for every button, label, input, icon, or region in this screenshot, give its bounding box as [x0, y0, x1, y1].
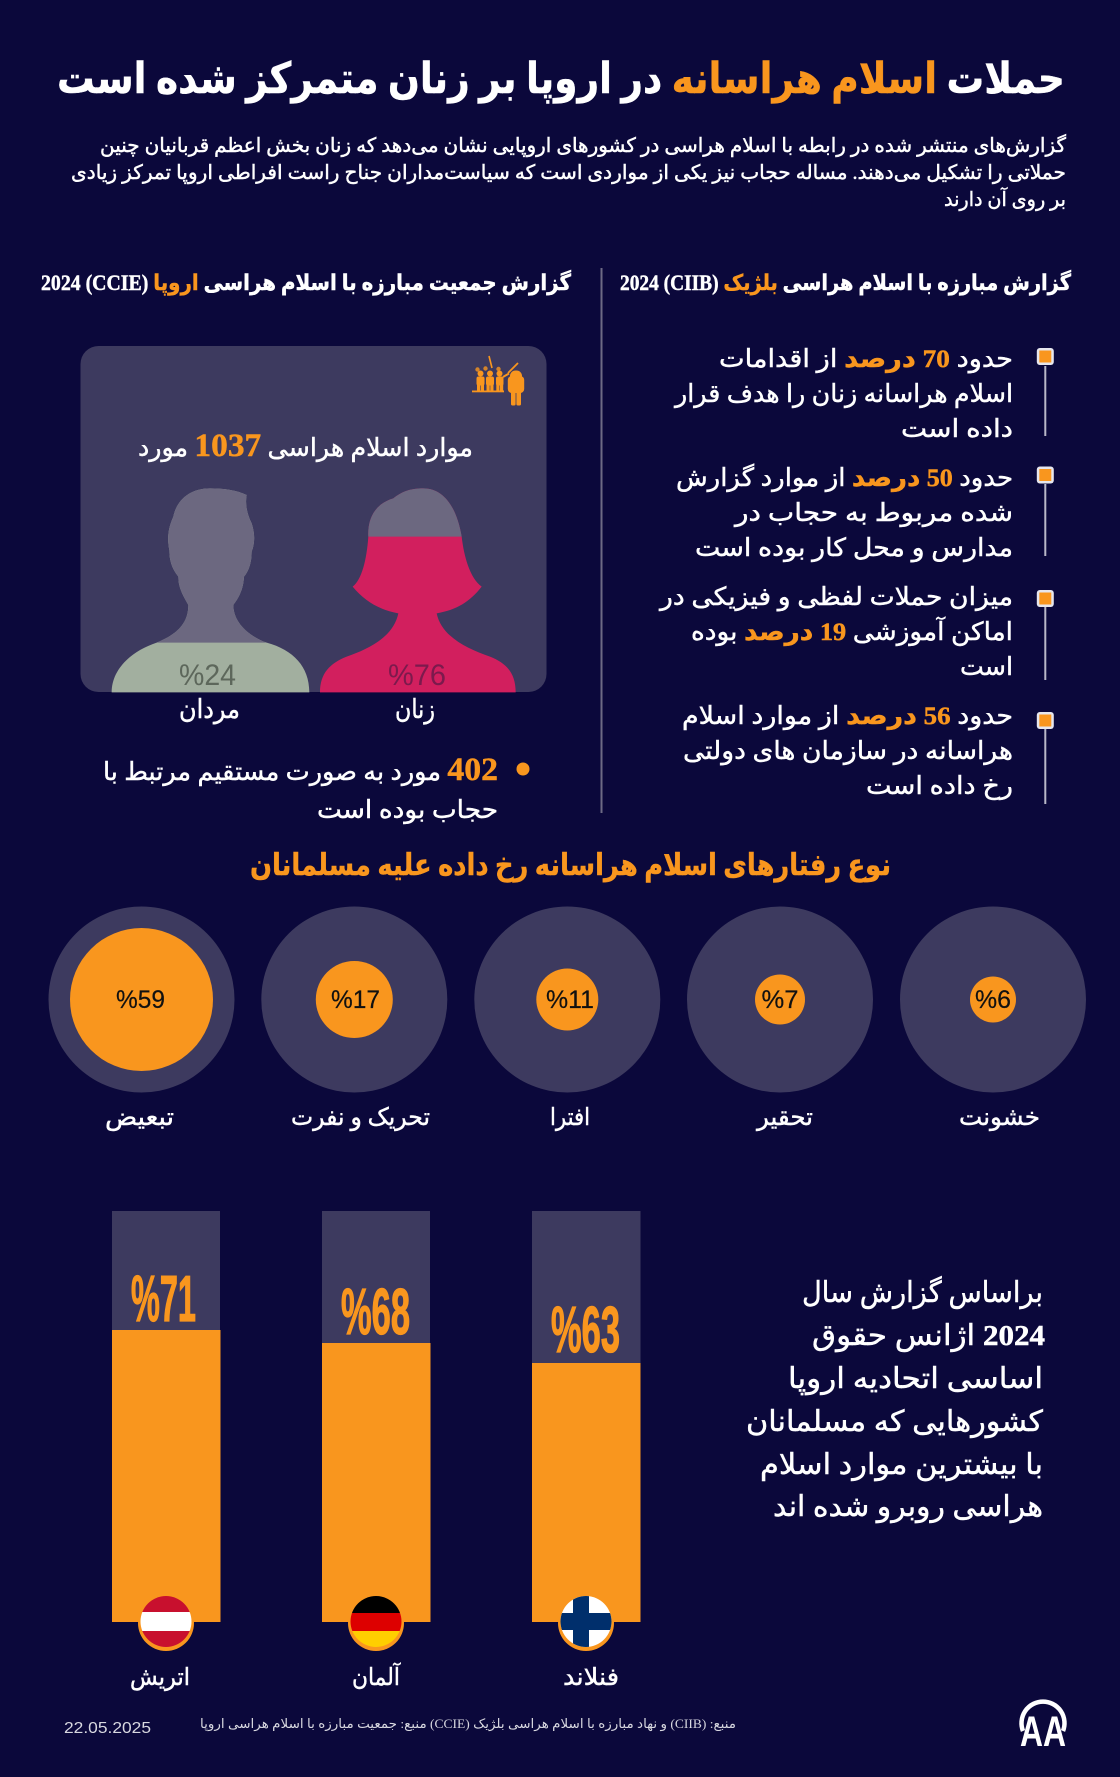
bubble: insult 7: %7 — [762, 986, 798, 1014]
bubble: incitement 17: تحریک و نفرت — [291, 1105, 430, 1131]
bubble: incitement 17 — [261, 906, 447, 1131]
panel: Belgium findings list — [658, 346, 1054, 804]
label: women: زنان — [395, 695, 435, 724]
list item 4: رخ داده است — [866, 773, 1013, 800]
bubble: slander 11: افترا — [550, 1105, 590, 1131]
list item 3 — [658, 584, 1054, 681]
text block: EU agency report: با بیشترین موارد اسلام — [760, 1449, 1043, 1481]
bar: Austria 71: %71 — [131, 1262, 196, 1335]
bubble: violence 6: %6 — [975, 986, 1011, 1014]
bubble: violence 6 — [900, 906, 1086, 1131]
bar: Finland 63: فنلاند — [563, 1665, 619, 1691]
callout: hijab cases: 402 مورد به صورت مستقیم مرتبط با — [103, 752, 498, 788]
intro text: گزارش‌های منتشر شده در رابطه با اسلام هراسی در کشورهای اروپایی نشان می‌دهد که زنان بخش اعظم قربانیان چنین — [100, 134, 1066, 158]
list item 1: داده است — [901, 416, 1013, 443]
bubble: insult 7 — [687, 906, 873, 1131]
text block: EU agency report — [746, 1276, 1045, 1523]
intro text — [71, 134, 1066, 211]
text block: EU agency report: 2024 اژانس حقوق — [812, 1320, 1045, 1352]
bubble: insult 7: تحقیر — [756, 1105, 813, 1131]
list item 4 — [682, 703, 1054, 804]
intro text: بر روی آن دارند — [944, 186, 1066, 211]
bubble: slander 11: %11 — [546, 986, 594, 1014]
logo: AA: AA — [1020, 1708, 1066, 1756]
list item 2 — [676, 463, 1054, 563]
bubble: discrimination 59: %59 — [116, 986, 165, 1014]
list item 1 — [673, 346, 1054, 443]
text block: EU agency report: اساسی اتحادیه اروپا — [788, 1363, 1043, 1396]
panel: Europe cases — [80, 346, 546, 692]
list item 1: اسلام هراسانه زنان را هدف قرار — [673, 381, 1013, 408]
list item 3: میزان حملات لفظی و فیزیکی در — [658, 584, 1013, 612]
date: 22.05.2025 — [64, 1720, 151, 1737]
bar: Finland 63 — [532, 1211, 640, 1691]
callout: hijab cases — [103, 752, 530, 824]
bar: Germany 68 — [322, 1211, 430, 1691]
men percentage: %24 — [179, 659, 236, 692]
list item 4: هراسانه در سازمان های دولتی — [683, 738, 1013, 766]
callout: hijab cases: حجاب بوده است — [317, 797, 498, 824]
bubble: violence 6: خشونت — [959, 1105, 1040, 1131]
list item 2: حدود 50 درصد از موارد گزارش — [676, 463, 1013, 493]
bar: Finland 63: %63 — [551, 1293, 620, 1366]
bubble: incitement 17: %17 — [331, 986, 380, 1014]
text block: EU agency report: براساس گزارش سال — [802, 1276, 1043, 1309]
bar: Austria 71 — [112, 1211, 220, 1691]
chart: behaviour bubbles — [48, 906, 1086, 1131]
list item 4: حدود 56 درصد از موارد اسلام — [682, 703, 1013, 731]
bar: Germany 68: آلمان — [352, 1662, 401, 1691]
icon: protesters and veiled woman — [472, 356, 524, 406]
bubble: slander 11 — [474, 906, 660, 1131]
heading: Belgium report: گزارش مبارزه با اسلام هراسی بلژیک (CIIB) 2024 — [620, 269, 1071, 296]
heading: Europe report: گزارش جمعیت مبارزه با اسلام هراسی اروپا (CCIE) 2024 — [41, 269, 571, 296]
logo: AA — [1020, 1702, 1066, 1756]
figure: men silhouette — [112, 488, 309, 692]
text block: EU agency report: هراسی روبرو شده اند — [773, 1491, 1043, 1523]
text block: EU agency report: کشورهایی که مسلمانان — [746, 1406, 1043, 1438]
label: men: مردان — [179, 695, 240, 725]
bar: Germany 68: %68 — [341, 1275, 410, 1348]
list item 1: حدود 70 درصد از اقدامات — [719, 346, 1013, 374]
list item 2: شده مربوط به حجاب در — [733, 500, 1013, 527]
source note: منبع: (CIIB) و نهاد مبارزه با اسلام هراسی بلژیک (CCIE) منبع: جمعیت مبارزه با اسلام هراسی اروپا — [200, 1716, 736, 1732]
list item 2: مدارس و محل کار بوده است — [695, 535, 1013, 563]
intro text: حملاتی را تشکیل می‌دهند. مساله حجاب نیز یکی از مواردی است که سیاست‌مداران جناح راست افراطی اروپا تمرکز زیادی — [71, 162, 1066, 185]
bubble: discrimination 59: تبعیض — [105, 1105, 174, 1131]
chart: country bars — [112, 1211, 640, 1691]
panel heading: total cases: موارد اسلام هراسی 1037 مورد — [138, 428, 473, 464]
bubble: discrimination 59 — [48, 906, 234, 1131]
section heading: behaviour types: نوع رفتارهای اسلام هراسانه رخ داده علیه مسلمانان — [250, 849, 891, 883]
list item 3: است — [960, 654, 1013, 681]
figure: women silhouette — [320, 488, 516, 692]
women percentage: %76 — [388, 659, 446, 692]
bar: Austria 71: اتریش — [130, 1665, 190, 1691]
title: حملات اسلام هراسانه در اروپا بر زنان متمرکز شده است — [57, 56, 1065, 104]
list item 3: اماکن آموزشی 19 درصد بوده — [691, 616, 1013, 646]
